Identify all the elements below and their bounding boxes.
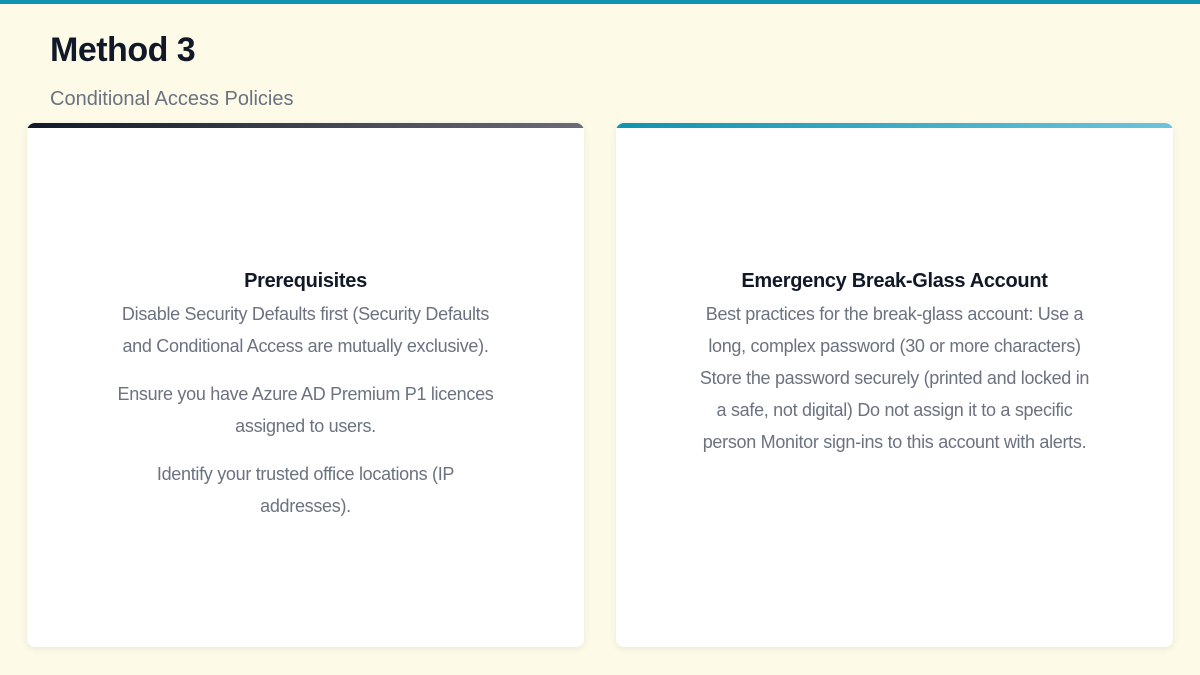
heading: prerequisites: Prerequisites bbox=[244, 270, 367, 292]
panel: break-glass account bbox=[616, 123, 1173, 647]
subtitle: Conditional Access Policies bbox=[50, 88, 293, 110]
text block: security defaults: Disable Security Defaults first (Security Defaults and Conditional Access are mutually exclusive). bbox=[122, 304, 489, 356]
text block: best practices bbox=[700, 304, 1089, 452]
text block: locations: Identify your trusted office locations (IP addresses). bbox=[157, 464, 454, 516]
text block: licences: Ensure you have Azure AD Premium P1 licences assigned to users. bbox=[118, 384, 494, 436]
panel: prerequisites bbox=[27, 123, 584, 647]
heading: break-glass: Emergency Break-Glass Account bbox=[741, 270, 1048, 292]
text block: best practices: Best practices for the break-glass account: Use a long, complex password (30 or more characters) Store the password securely (printed and locked in bbox=[700, 304, 1089, 388]
title: Method 3 bbox=[50, 31, 195, 69]
text block: best practices: a safe, not digital) Do not assign it to a specific person Monitor sign-ins to this account with alerts. bbox=[703, 400, 1086, 452]
